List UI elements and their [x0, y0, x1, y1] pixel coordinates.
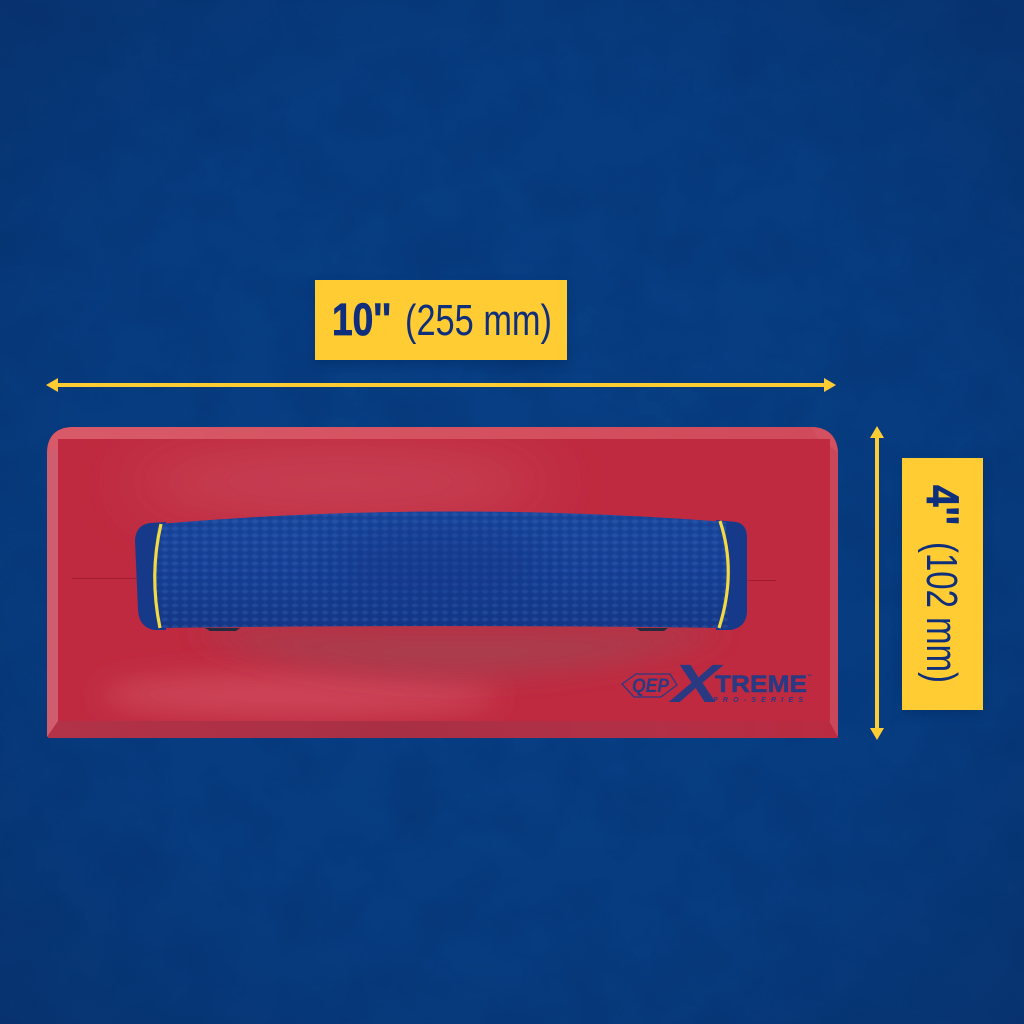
- handle shadow: [190, 630, 730, 675]
- width label: [315, 280, 567, 364]
- red base pad: [47, 427, 838, 738]
- handle feet: [205, 628, 668, 631]
- trademark: ™: [807, 674, 812, 680]
- red face: [58, 439, 830, 721]
- width label: 10'': [332, 294, 391, 345]
- bottom bevel: [48, 721, 838, 738]
- right bevel: [829, 446, 838, 737]
- handle end caps: [135, 522, 166, 630]
- handle: [135, 505, 747, 635]
- X mark: X: [668, 654, 724, 714]
- logo: [622, 654, 812, 714]
- height label: [902, 458, 983, 714]
- PRO-SERIES: PRO-SERIES: [713, 697, 803, 704]
- TREME wordmark: TREME: [715, 671, 807, 698]
- yellow rings: [155, 524, 161, 628]
- width arrow: [46, 378, 836, 392]
- height label: (102 mm): [917, 542, 966, 683]
- QEP diamond: [622, 674, 677, 697]
- centre slit marks: [72, 578, 138, 579]
- QEP diamond: QEP: [632, 676, 669, 697]
- width label: (255 mm): [405, 296, 552, 345]
- height label: 4'': [917, 485, 968, 525]
- trowel float: [47, 427, 838, 738]
- left bevel: [47, 446, 58, 737]
- height arrow: [870, 426, 884, 740]
- top bevel: [47, 427, 829, 452]
- handle grip: [154, 511, 728, 628]
